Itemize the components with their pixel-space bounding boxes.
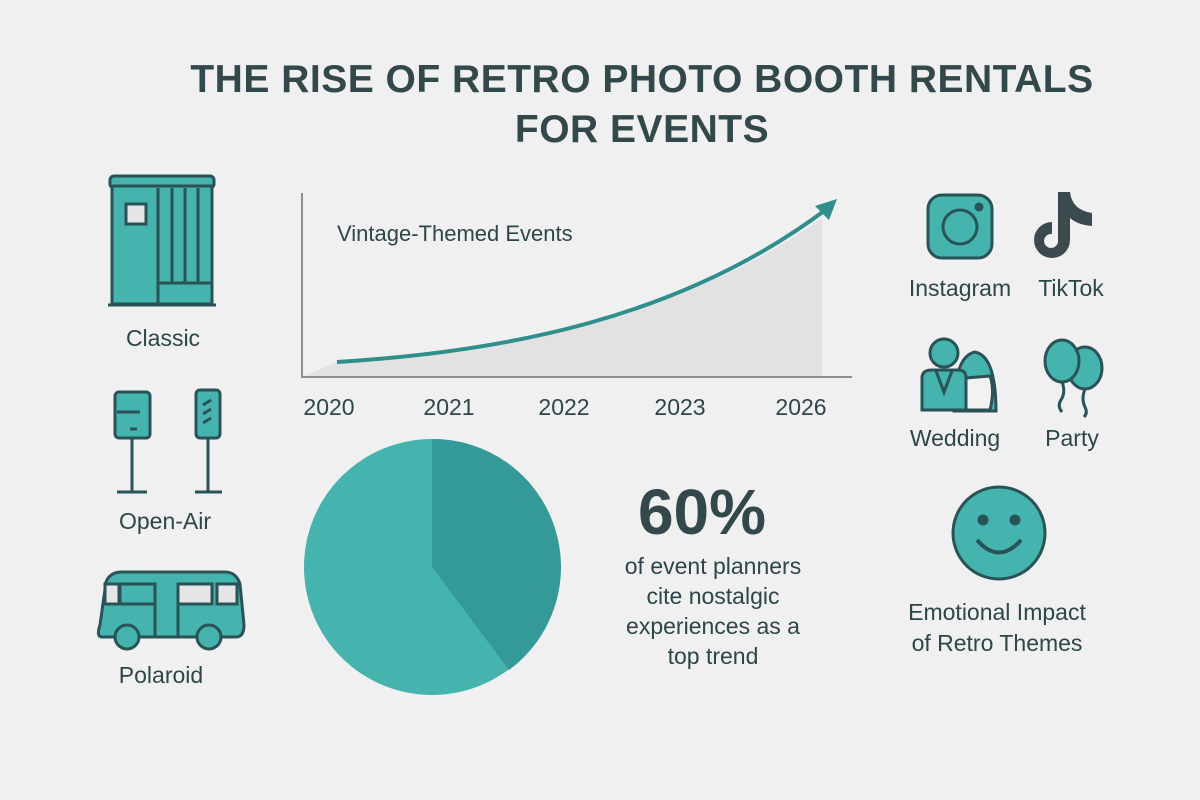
pie chart bbox=[304, 439, 561, 695]
icon: open-air bbox=[115, 390, 222, 492]
icon: instagram bbox=[928, 195, 992, 258]
stat: 60%: top trend bbox=[668, 643, 758, 669]
stat: 60%: of event planners bbox=[625, 553, 801, 579]
line chart: 2026 bbox=[775, 394, 827, 420]
icon: polaroid bus bbox=[98, 572, 244, 649]
label: polaroid: Polaroid bbox=[119, 662, 203, 688]
line chart: 2023 bbox=[654, 394, 706, 420]
stat: 60%: experiences as a bbox=[626, 613, 800, 639]
label: emotional impact: Emotional Impact bbox=[908, 599, 1086, 625]
label: open-air: Open-Air bbox=[119, 508, 211, 534]
title: THE RISE OF RETRO PHOTO BOOTH RENTALS bbox=[190, 58, 1094, 101]
icon: classic booth bbox=[108, 176, 216, 305]
text: Wedding bbox=[910, 425, 1000, 451]
title bbox=[190, 58, 1094, 151]
text: Party bbox=[1045, 425, 1099, 451]
title: FOR EVENTS bbox=[515, 108, 769, 151]
stat: 60%: 60% bbox=[638, 476, 766, 548]
line chart: 2021 bbox=[423, 394, 475, 420]
text: Instagram bbox=[909, 275, 1011, 301]
line chart: 2020 bbox=[303, 394, 355, 420]
label: emotional impact bbox=[908, 599, 1086, 656]
icon: party balloons bbox=[1045, 340, 1102, 417]
stat: 60%: cite nostalgic bbox=[647, 583, 779, 609]
icon: wedding bbox=[922, 339, 996, 411]
line chart: 2022 bbox=[538, 394, 590, 420]
icon: smiley bbox=[953, 487, 1045, 579]
line chart bbox=[302, 193, 852, 420]
icon: tiktok bbox=[1034, 192, 1092, 258]
label: emotional impact: of Retro Themes bbox=[912, 630, 1082, 656]
text: TikTok bbox=[1038, 275, 1104, 301]
label: classic: Classic bbox=[126, 325, 200, 351]
line chart: Vintage-Themed Events bbox=[337, 221, 573, 246]
stat: 60% bbox=[625, 476, 801, 669]
